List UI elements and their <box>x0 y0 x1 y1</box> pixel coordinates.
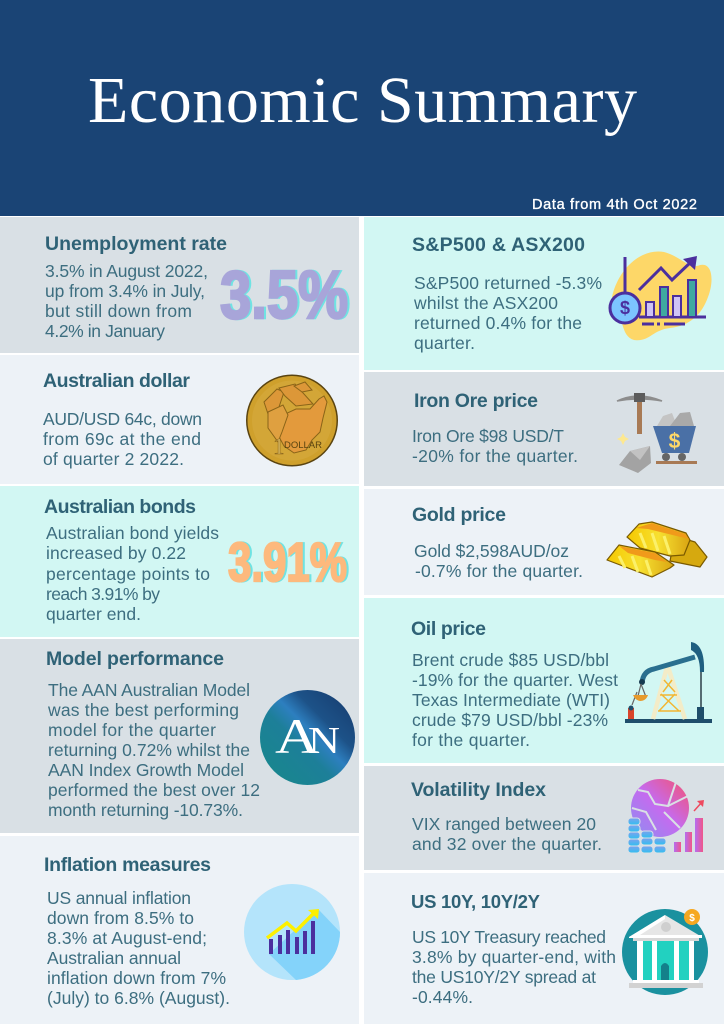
big number: 3.5%: 3.5% <box>220 257 348 333</box>
panel: iron ore price <box>364 372 724 486</box>
panel: australian bonds <box>0 486 359 637</box>
heading: oil price: Oil price <box>411 618 486 640</box>
icon: one dollar coin: 1 <box>273 434 284 459</box>
text: unemployment details: 4.2% in January <box>45 321 165 341</box>
text: dollar details <box>43 409 202 469</box>
text: bond details: quarter end. <box>46 604 141 624</box>
text: inflation details: inflation down from 7% <box>47 968 226 988</box>
panel: volatility index <box>364 766 724 870</box>
heading: australian dollar: Australian dollar <box>43 370 190 392</box>
text: gold details <box>414 541 583 581</box>
text: inflation details <box>47 888 230 1008</box>
text: model details: returning 0.72% whilst the <box>48 740 250 760</box>
text: index details <box>413 273 602 353</box>
icon: pickaxe and ore cart <box>617 393 697 473</box>
text: volatility details: VIX ranged between 20 <box>412 814 596 834</box>
text: volatility details: and 32 over the quarter. <box>412 834 602 854</box>
text: inflation details: down from 8.5% to <box>47 908 194 928</box>
panel: model performance <box>0 639 359 833</box>
text: unemployment details: 3.5% in August 2022, <box>45 261 208 281</box>
text: model details: month returning -10.73%. <box>48 800 243 820</box>
panel: gold price <box>364 489 724 595</box>
text: bond details: percentage points to <box>46 564 210 584</box>
text: gold details: -0.7% for the quarter. <box>415 561 583 581</box>
icon: bank building: $ <box>689 913 695 924</box>
text: treasury details: the US10Y/2Y spread at <box>412 967 596 987</box>
panel: S&P500 and ASX200 <box>364 217 724 370</box>
icon: one dollar coin: DOLLAR <box>284 440 322 451</box>
text: bond details <box>46 523 219 624</box>
icon: growth chart with dollar <box>610 252 712 340</box>
text: index details: returned 0.4% for the <box>414 313 582 333</box>
header banner <box>0 0 724 216</box>
heading: US 10Y, 10Y/2Y: US 10Y, 10Y/2Y <box>411 891 541 912</box>
icon: oil pump jack <box>625 642 712 723</box>
text: unemployment details: up from 3.4% in July, <box>45 281 205 301</box>
big number: 3.5%: 3.5% <box>222 257 350 333</box>
heading: model performance: Model performance <box>46 648 224 670</box>
panel: australian dollar <box>0 355 359 484</box>
text: oil details: Texas Intermediate (WTI) <box>412 690 610 710</box>
icon: AAN logo <box>260 690 355 785</box>
text: dollar details: of quarter 2 2022. <box>43 449 184 469</box>
panel: oil price <box>364 598 724 763</box>
icon: pickaxe and ore cart: $ <box>669 430 681 453</box>
heading: inflation measures: Inflation measures <box>44 854 211 876</box>
icon: inflation chart <box>244 884 340 980</box>
heading: iron ore price: Iron Ore price <box>414 390 538 412</box>
text: gold details: Gold $2,598AUD/oz <box>414 541 569 561</box>
text: model details: The AAN Australian Model <box>48 680 250 700</box>
text: inflation details: Australian annual <box>47 948 181 968</box>
text: bond details: Australian bond yields <box>46 523 219 543</box>
text: model details: AAN Index Growth Model <box>48 760 244 780</box>
icon: growth chart with dollar: $ <box>620 298 630 318</box>
text: treasury details <box>412 927 616 1007</box>
text: iron ore details: -20% for the quarter. <box>412 446 578 466</box>
text: model details <box>47 680 260 820</box>
text: oil details <box>412 650 618 750</box>
icon: one dollar coin <box>246 374 338 466</box>
text: iron ore details: Iron Ore $98 USD/T <box>412 426 564 446</box>
text: index details: S&P500 returned -5.3% <box>414 273 602 293</box>
text: volatility details <box>412 814 602 854</box>
text: dollar details: AUD/USD 64c, down <box>43 409 202 429</box>
big number: 3.91%: 3.91% <box>230 531 349 593</box>
heading: volatility index: Volatility Index <box>411 779 546 801</box>
text: inflation details: (July) to 6.8% (August). <box>47 988 230 1008</box>
text: unemployment details <box>45 261 208 341</box>
icon: globe, coins and bars <box>628 779 704 853</box>
data date note: Data from 4th Oct 2022 <box>532 197 697 213</box>
heading: australian bonds: Australian bonds <box>44 496 196 518</box>
icon: gold bars <box>607 522 707 577</box>
text: bond details: increased by 0.22 <box>46 543 186 563</box>
text: index details: whilst the ASX200 <box>413 293 558 313</box>
heading: unemployment rate: Unemployment rate <box>45 233 227 255</box>
text: treasury details: US 10Y Treasury reached <box>412 927 606 947</box>
heading: S&P500 & ASX200: S&P500 & ASX200 <box>412 234 585 256</box>
panel: US 10Y and 10Y/2Y <box>364 873 724 1024</box>
text: unemployment details: but still down from <box>45 301 192 321</box>
text: index details: quarter. <box>414 333 475 353</box>
text: bond details: reach 3.91% by <box>46 584 160 604</box>
text: treasury details: 3.8% by quarter-end, with <box>412 947 616 967</box>
text: oil details: Brent crude $85 USD/bbl <box>412 650 609 670</box>
icon: AAN logo: N <box>308 720 340 762</box>
big number: 3.91%: 3.91% <box>228 531 347 593</box>
text: iron ore details <box>412 426 578 466</box>
text: dollar details: from 69c at the end <box>43 429 201 449</box>
text: oil details: for the quarter. <box>412 730 530 750</box>
text: model details: model for the quarter <box>48 720 216 740</box>
text: inflation details: US annual inflation <box>47 888 191 908</box>
title: Economic Summary <box>88 64 637 137</box>
panel: inflation measures <box>0 836 359 1024</box>
text: inflation details: 8.3% at August-end; <box>47 928 207 948</box>
icon: AAN logo: A <box>275 708 319 764</box>
panel: unemployment rate <box>0 217 359 353</box>
text: model details: was the best performing <box>47 700 239 720</box>
text: oil details: crude $79 USD/bbl -23% <box>412 710 608 730</box>
text: oil details: -19% for the quarter. West <box>412 670 618 690</box>
text: treasury details: -0.44%. <box>412 987 473 1007</box>
heading: gold price: Gold price <box>412 504 506 526</box>
text: model details: performed the best over 12 <box>48 780 260 800</box>
icon: bank building <box>622 909 708 995</box>
